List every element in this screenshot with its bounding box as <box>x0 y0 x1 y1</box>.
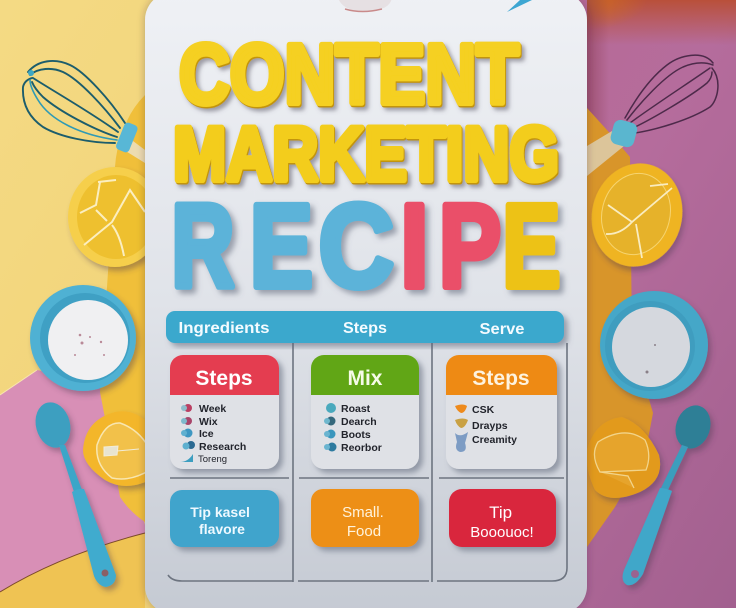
title line: RECIPE: R <box>171 180 234 312</box>
tip button: red: Tip <box>489 503 512 522</box>
title line: RECIPE: C <box>319 180 394 312</box>
tip button: red <box>449 489 556 547</box>
list items <box>180 403 246 465</box>
title line: RECIPE: I <box>400 180 428 312</box>
list items: Drayps <box>472 420 508 432</box>
header label: Ingredients: Ingredients <box>178 320 270 337</box>
title line: MARKETING: MARKETING <box>173 112 559 197</box>
tip button: blue <box>170 490 279 547</box>
icon: mixing bowl, left <box>30 285 136 391</box>
icon: cup at top edge <box>338 0 392 12</box>
list items: Week <box>199 403 226 415</box>
icon: lemon slice, left <box>68 167 162 267</box>
tip button: orange <box>311 489 419 547</box>
icon: whisk, left <box>23 61 145 163</box>
list items: Boots <box>341 429 371 441</box>
tip button: orange: Food <box>347 523 381 540</box>
icon: mixing bowl, right <box>600 291 708 399</box>
icon: small lemon mould, right <box>587 417 660 498</box>
card: green mix <box>311 355 419 469</box>
icon: spoon, left <box>31 398 116 587</box>
table grid lines <box>168 343 567 582</box>
title line: RECIPE: P <box>439 180 501 312</box>
title line: RECIPE: E <box>250 180 313 312</box>
header label: Serve: Serve <box>480 321 525 338</box>
list items <box>324 403 382 454</box>
card: red steps <box>170 355 279 469</box>
list items: Dearch <box>341 416 377 428</box>
amber disc behind the board, right <box>587 108 653 547</box>
tip button: orange: Small. <box>342 504 384 521</box>
list items: Toreng <box>198 454 227 465</box>
icon: small lemon mould, left <box>83 411 150 486</box>
icon: lemon slice, right <box>581 154 693 276</box>
tip button: red: Booouoc! <box>470 524 534 541</box>
card heading: Steps <box>195 367 253 390</box>
list items <box>455 404 517 452</box>
title line: RECIPE <box>171 180 560 312</box>
list items: Wix <box>199 416 218 428</box>
list items: Research <box>199 441 246 453</box>
card heading: Mix <box>347 367 383 390</box>
panel: recipe board <box>145 0 587 608</box>
title line: CONTENT: CONTENT <box>179 27 519 121</box>
list items: Reorbor <box>341 442 382 454</box>
amber disc behind the board, left <box>100 95 145 522</box>
list items: Roast <box>341 403 371 415</box>
card: orange steps <box>446 355 557 469</box>
header label: Steps: Steps <box>343 320 387 337</box>
list items: Ice <box>199 428 214 440</box>
title line: RECIPE: E <box>502 180 560 312</box>
icon: whisk, right <box>587 55 718 176</box>
title <box>171 27 560 312</box>
list items: Creamity <box>472 434 517 446</box>
card heading: Steps <box>472 367 530 390</box>
list items: CSK <box>472 404 495 416</box>
tip button: blue: Tip kasel <box>190 504 250 520</box>
icon: blue pen tip <box>507 0 532 12</box>
icon: spoon, right <box>623 401 716 585</box>
table header bar <box>166 311 564 343</box>
tip button: blue: flavore <box>199 521 245 537</box>
